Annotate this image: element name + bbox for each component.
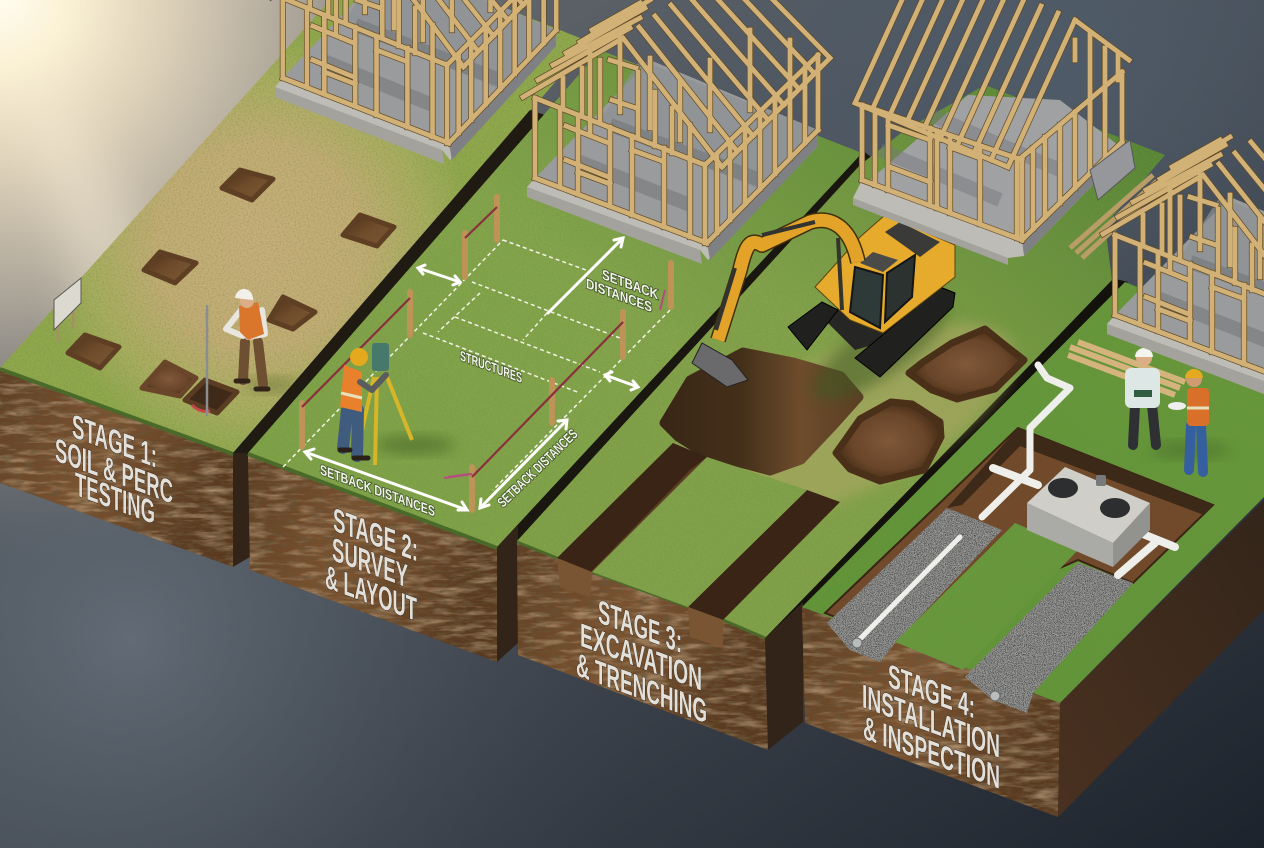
machine body xyxy=(815,215,955,333)
block 4 grass surface xyxy=(802,282,1264,703)
concrete septic tank xyxy=(1027,467,1150,567)
trench right xyxy=(688,490,840,620)
excavated pit xyxy=(825,428,1213,640)
center grass strip xyxy=(895,523,1078,670)
cab roof xyxy=(860,252,898,272)
stage 1 label xyxy=(55,401,173,539)
surveyor with total station xyxy=(340,343,455,465)
structures label: STRUCTURES xyxy=(460,348,522,387)
gap shadow between blocks 2 and 3 xyxy=(497,150,875,552)
test pit 2 xyxy=(343,215,394,246)
inspector xyxy=(1125,348,1230,458)
perc test hole with rod xyxy=(185,305,237,416)
block 2 dirt side xyxy=(497,525,518,662)
test pit 4 xyxy=(269,297,315,329)
block 3 dirt front xyxy=(517,541,768,750)
block 4 dirt front xyxy=(802,607,1060,817)
grass lip xyxy=(517,542,765,638)
block 1 grass surface xyxy=(0,0,590,453)
cab front glass xyxy=(850,267,883,328)
cab side window xyxy=(885,255,915,322)
soil pile front xyxy=(836,402,941,481)
boom arm outline xyxy=(718,220,858,340)
block 1 dirt front xyxy=(0,370,233,567)
stage 2 label xyxy=(325,498,418,629)
stage 2 label: SURVEY xyxy=(332,531,408,596)
undercarriage xyxy=(820,300,890,350)
front notch left xyxy=(557,558,592,597)
stage 2 label: & LAYOUT xyxy=(325,558,417,629)
hydraulic rams xyxy=(716,222,842,330)
stage 3 label: STAGE 3: xyxy=(598,593,682,661)
test pit 1 xyxy=(222,170,273,200)
survey stakes and flagging xyxy=(302,197,671,510)
setback arrows xyxy=(305,238,638,510)
stage 3 label: EXCAVATION xyxy=(580,617,702,698)
soil pile right xyxy=(909,329,1024,399)
block 2 dirt front xyxy=(248,453,497,662)
tan soil patch xyxy=(638,281,1042,569)
gravel bed right xyxy=(965,563,1133,713)
excavator xyxy=(692,215,960,417)
front notch right xyxy=(688,607,723,648)
pipe ends xyxy=(852,638,1000,701)
stage 4 label: INSTALLATION xyxy=(862,678,1000,766)
setback distances label top xyxy=(586,261,658,318)
house frame 3 xyxy=(853,0,1129,265)
site worker xyxy=(1168,369,1209,472)
worker with clipboard xyxy=(226,289,300,392)
house frame 1 xyxy=(271,0,568,164)
stage 4 label xyxy=(862,648,1000,797)
excavation pit xyxy=(664,352,859,471)
block 4 dirt side xyxy=(1058,500,1264,817)
stage 4 label: STAGE 4: xyxy=(888,658,975,726)
stage 3 label: & TRENCHING xyxy=(576,646,707,731)
boom arm xyxy=(718,220,858,340)
panel: stage 4 installation and inspection xyxy=(802,282,1264,817)
block 1 grass edge xyxy=(0,369,233,454)
icon: site sign xyxy=(54,278,81,342)
gap shadow between blocks 1 and 2 xyxy=(233,110,545,453)
lumber stack xyxy=(1068,342,1185,395)
grass edge xyxy=(248,454,497,548)
stage 4 label: & INSPECTION xyxy=(863,709,1000,797)
setback distances label right: SETBACK DISTANCES xyxy=(494,426,581,510)
soil mound xyxy=(142,362,196,396)
test pit 5 xyxy=(68,335,119,368)
gap shadow between blocks 3 and 4 xyxy=(765,278,1128,638)
engine hood xyxy=(885,222,940,257)
block 3 grass surface xyxy=(517,85,1165,638)
stage 1 label: SOIL & PERC xyxy=(55,431,173,512)
setback distances label top: DISTANCES xyxy=(586,276,652,316)
block 3 dirt side xyxy=(765,602,803,750)
panel: stage 3 excavation and trenching xyxy=(517,85,1165,750)
trench left floor xyxy=(578,457,707,585)
stage 1 label: TESTING xyxy=(75,466,155,532)
concrete panel xyxy=(1090,140,1135,200)
stage 3 label xyxy=(576,585,707,731)
center grass strip xyxy=(592,457,807,607)
pit back wall xyxy=(947,428,1213,515)
panel: stage 2 survey and layout xyxy=(233,50,875,662)
panel: stage 1 soil and perc testing xyxy=(0,0,590,567)
lumber stack near house xyxy=(1070,175,1160,258)
white pipes xyxy=(857,365,1175,642)
trench left xyxy=(557,443,707,572)
dashed layout lines xyxy=(283,240,670,490)
block 1 dirt side xyxy=(233,436,250,567)
house frame 4 xyxy=(1103,98,1264,401)
setback distances label front: SETBACK DISTANCES xyxy=(320,462,435,521)
test pit 3 xyxy=(144,252,196,283)
stage 2 label: STAGE 2: xyxy=(333,501,418,569)
stage 1 label: STAGE 1: xyxy=(72,408,157,476)
gravel bed left xyxy=(827,508,1002,662)
track left xyxy=(788,302,838,350)
setback distances label top: SETBACK xyxy=(602,267,658,303)
block 2 grass surface xyxy=(248,50,862,547)
track right xyxy=(855,287,955,377)
house frame 2 xyxy=(523,0,830,264)
bucket xyxy=(692,343,748,387)
